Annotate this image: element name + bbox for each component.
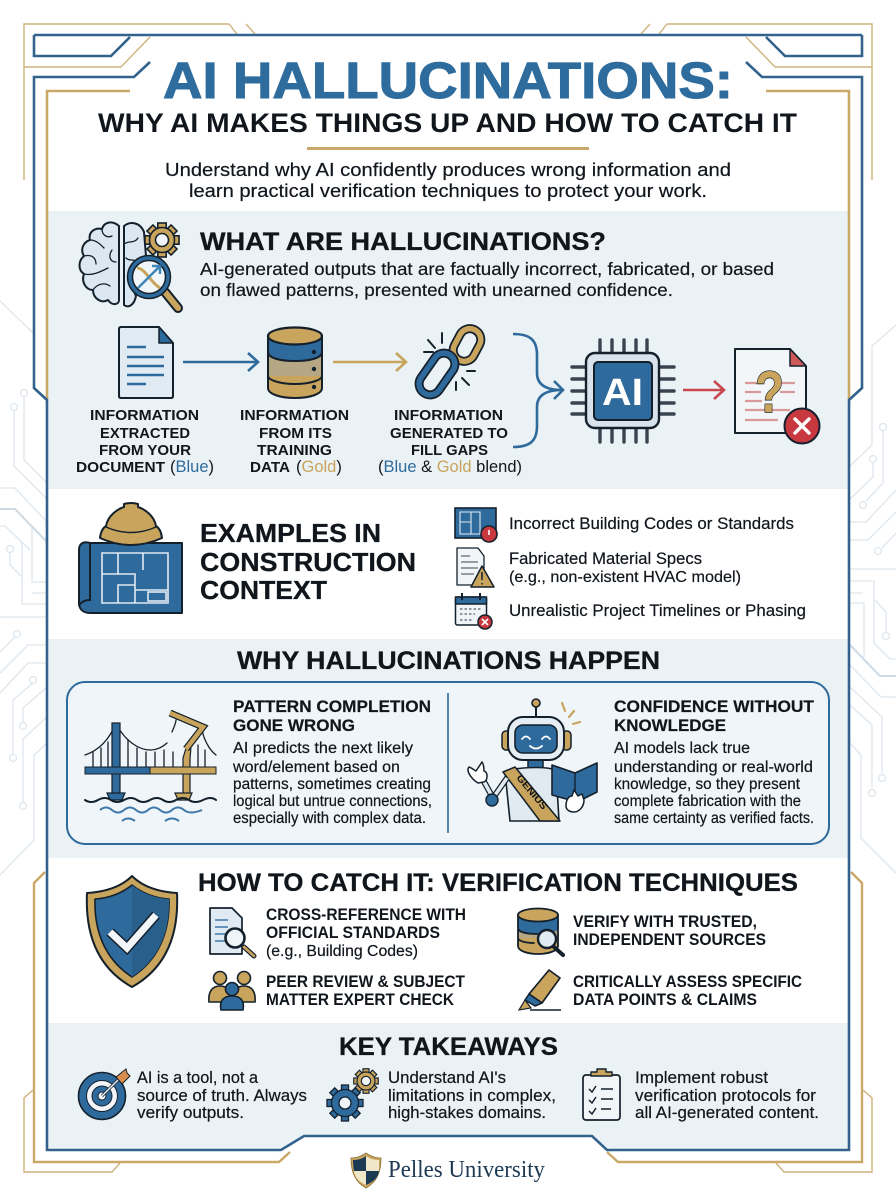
- icon: AI chip: AI: [602, 372, 643, 414]
- technique: cross-reference: CROSS-REFERENCE WITH: [266, 906, 466, 924]
- text: pattern completion gone wrong: patterns, sometimes creating: [233, 776, 431, 793]
- icon: broken bridge: [85, 713, 216, 821]
- decorative frame right: [448, 24, 872, 1172]
- technique: peer review: PEER REVIEW & SUBJECT: [266, 973, 465, 991]
- top border line: [130, 34, 766, 36]
- label: training data information: FROM ITS: [259, 425, 332, 442]
- definition text: [200, 259, 774, 300]
- takeaway: verification protocols: Implement robust: [635, 1069, 768, 1087]
- heading: key takeaways: KEY TAKEAWAYS: [339, 1033, 558, 1061]
- technique: peer review: MATTER EXPERT CHECK: [266, 991, 454, 1009]
- heading: why hallucinations happen: WHY HALLUCINATIONS HAPPEN: [237, 647, 660, 675]
- takeaway: tool not truth: [137, 1069, 307, 1122]
- label: generated information: (: [378, 458, 384, 476]
- text: confidence without knowledge: KNOWLEDGE: [614, 716, 726, 735]
- technique: critically assess: DATA POINTS & CLAIMS: [573, 991, 757, 1009]
- text: pattern completion gone wrong: AI predicts the next likely: [233, 740, 413, 757]
- heading: what are hallucinations: WHAT ARE HALLUCINATIONS?: [200, 228, 606, 256]
- label: training data information: INFORMATION: [240, 407, 349, 424]
- example: fabricated material specs: Fabricated Material Specs: [509, 550, 702, 568]
- heading: how to catch it: HOW TO CATCH IT: VERIFICATION TECHNIQUES: [198, 869, 798, 897]
- intro text: [165, 159, 731, 201]
- icon: AI chip: [572, 340, 674, 442]
- technique: critically assess: CRITICALLY ASSESS SPECIFIC: [573, 973, 802, 991]
- example: unrealistic timelines: Unrealistic Project Timelines or Phasing: [509, 602, 806, 620]
- definition text: AI-generated outputs that are factually incorrect, fabricated, or based: [200, 259, 774, 279]
- center divider: [447, 693, 449, 833]
- takeaway: tool not truth: source of truth. Always: [137, 1087, 307, 1105]
- example: incorrect building codes: Incorrect Building Codes or Standards: [509, 515, 794, 533]
- icon: verification shield: [87, 876, 177, 987]
- icon: brain with gear and magnifier: [80, 222, 179, 308]
- icon: target: [78, 1069, 130, 1120]
- arrow: training data to gaps: [333, 353, 406, 371]
- takeaway: verification protocols: all AI-generated content.: [635, 1104, 819, 1122]
- arrow: AI to wrong output: [683, 381, 724, 399]
- text: pattern completion gone wrong: word/element based on: [232, 759, 400, 776]
- text: confidence without knowledge: CONFIDENCE WITHOUT: [614, 697, 815, 716]
- takeaway: understand limitations: [388, 1069, 556, 1122]
- icon: erroneous document: [735, 349, 820, 444]
- label: document information: DOCUMENT: [76, 459, 165, 476]
- text: confidence without knowledge: [614, 697, 815, 827]
- label: generated information: Blue & Gold blend): [384, 458, 522, 476]
- icon: erroneous document: ?: [755, 360, 784, 425]
- label: training data information: DATA: [250, 459, 290, 476]
- technique: verify with trusted sources: INDEPENDENT SOURCES: [573, 931, 766, 949]
- text: confidence without knowledge: knowledge, so they present: [614, 776, 801, 793]
- example: fabricated material specs: (e.g., non-existent HVAC model): [509, 569, 741, 586]
- takeaway: understand limitations: high-stakes domains.: [388, 1104, 546, 1122]
- panel: why hallucinations happen: [48, 639, 848, 858]
- icon: database: [268, 328, 322, 398]
- icon: broken chain link: [415, 325, 485, 399]
- icon: document search: [210, 908, 254, 956]
- title: AI HALLUCINATIONS:: [163, 52, 733, 109]
- label: training data information: TRAINING: [257, 442, 332, 459]
- label: document information: INFORMATION: [90, 407, 199, 424]
- icon: genius robot with book: GENIUS: [514, 773, 549, 812]
- text: confidence without knowledge: understanding or real-world: [614, 759, 813, 776]
- bracket merging inputs: [513, 334, 563, 447]
- intro text: learn practical verification techniques to protect your work.: [189, 180, 707, 201]
- label: training data information: (: [296, 458, 302, 476]
- icon: highlighter: [519, 970, 561, 1010]
- text: confidence without knowledge: AI models lack true: [614, 740, 750, 757]
- icon: document: [119, 327, 173, 398]
- text: pattern completion gone wrong: [232, 697, 432, 827]
- text: confidence without knowledge: same certainty as verified facts.: [614, 810, 814, 827]
- text: pattern completion gone wrong: especially with complex data.: [233, 810, 426, 827]
- takeaway: tool not truth: AI is a tool, not a: [137, 1069, 259, 1087]
- icon: blueprint warning: [455, 508, 497, 542]
- label: generated information: FILL GAPS: [411, 442, 488, 459]
- panel: key takeaways: [48, 1023, 848, 1150]
- background circuit pattern: [0, 301, 896, 875]
- label: document information: EXTRACTED: [100, 425, 190, 442]
- logo wordmark: Pelles University: [388, 1157, 545, 1183]
- label: generated information: GENERATED TO: [390, 425, 508, 442]
- icon: document warning: [457, 548, 494, 587]
- panel: how to catch it: [48, 858, 848, 1023]
- text: pattern completion gone wrong: GONE WRONG: [233, 716, 355, 735]
- logo shield: [351, 1153, 381, 1188]
- label: generated information: INFORMATION: [394, 407, 503, 424]
- heading: examples in construction context: EXAMPLES IN: [200, 518, 381, 548]
- label: document information: FROM YOUR: [99, 442, 191, 459]
- takeaway: verification protocols: verification protocols for: [635, 1087, 817, 1105]
- text: pattern completion gone wrong: logical but untrue connections,: [233, 793, 432, 810]
- panel: what are hallucinations: [48, 211, 848, 489]
- heading: examples in construction context: CONSTRUCTION: [200, 547, 416, 577]
- decorative frame left: [24, 24, 448, 1172]
- takeaway: tool not truth: verify outputs.: [137, 1104, 244, 1122]
- arrow: document to training data: [183, 353, 258, 371]
- text: confidence without knowledge: complete fabrication with the: [614, 793, 801, 810]
- technique: cross-reference: (e.g., Building Codes): [266, 943, 418, 960]
- example: fabricated material specs: [509, 550, 741, 586]
- label: document information: (: [170, 458, 176, 476]
- heading: examples in construction context: CONTEXT: [200, 575, 327, 605]
- subtitle: WHY AI MAKES THINGS UP AND HOW TO CATCH IT: [98, 108, 798, 138]
- panel: examples in construction context: [48, 489, 848, 639]
- icon: database search: [518, 908, 563, 955]
- technique: cross-reference: OFFICIAL STANDARDS: [266, 924, 440, 942]
- technique: cross-reference: [266, 906, 466, 960]
- technique: verify with trusted sources: VERIFY WITH TRUSTED,: [573, 913, 757, 931]
- takeaway: understand limitations: Understand AI's: [388, 1069, 506, 1087]
- footer logo: [351, 1153, 545, 1188]
- rounded card outline: [67, 682, 829, 844]
- intro text: Understand why AI confidently produces wrong information and: [165, 159, 731, 180]
- text: pattern completion gone wrong: PATTERN COMPLETION: [233, 697, 431, 716]
- label: training data information: Gold): [302, 458, 342, 476]
- icon: calendar error: [456, 593, 492, 629]
- icon: genius robot with book: [468, 699, 597, 821]
- takeaway: understand limitations: limitations in complex,: [388, 1087, 556, 1105]
- icon: peer review people: [209, 972, 255, 1010]
- definition text: on flawed patterns, presented with unearned confidence.: [200, 280, 673, 300]
- label: document information: Blue): [176, 458, 214, 476]
- takeaway: verification protocols: [635, 1069, 819, 1122]
- icon: checklist clipboard: [583, 1069, 620, 1120]
- icon: blueprint with hard hat: [79, 503, 182, 613]
- icon: gears: [327, 1069, 378, 1121]
- gold title rule: [307, 147, 589, 150]
